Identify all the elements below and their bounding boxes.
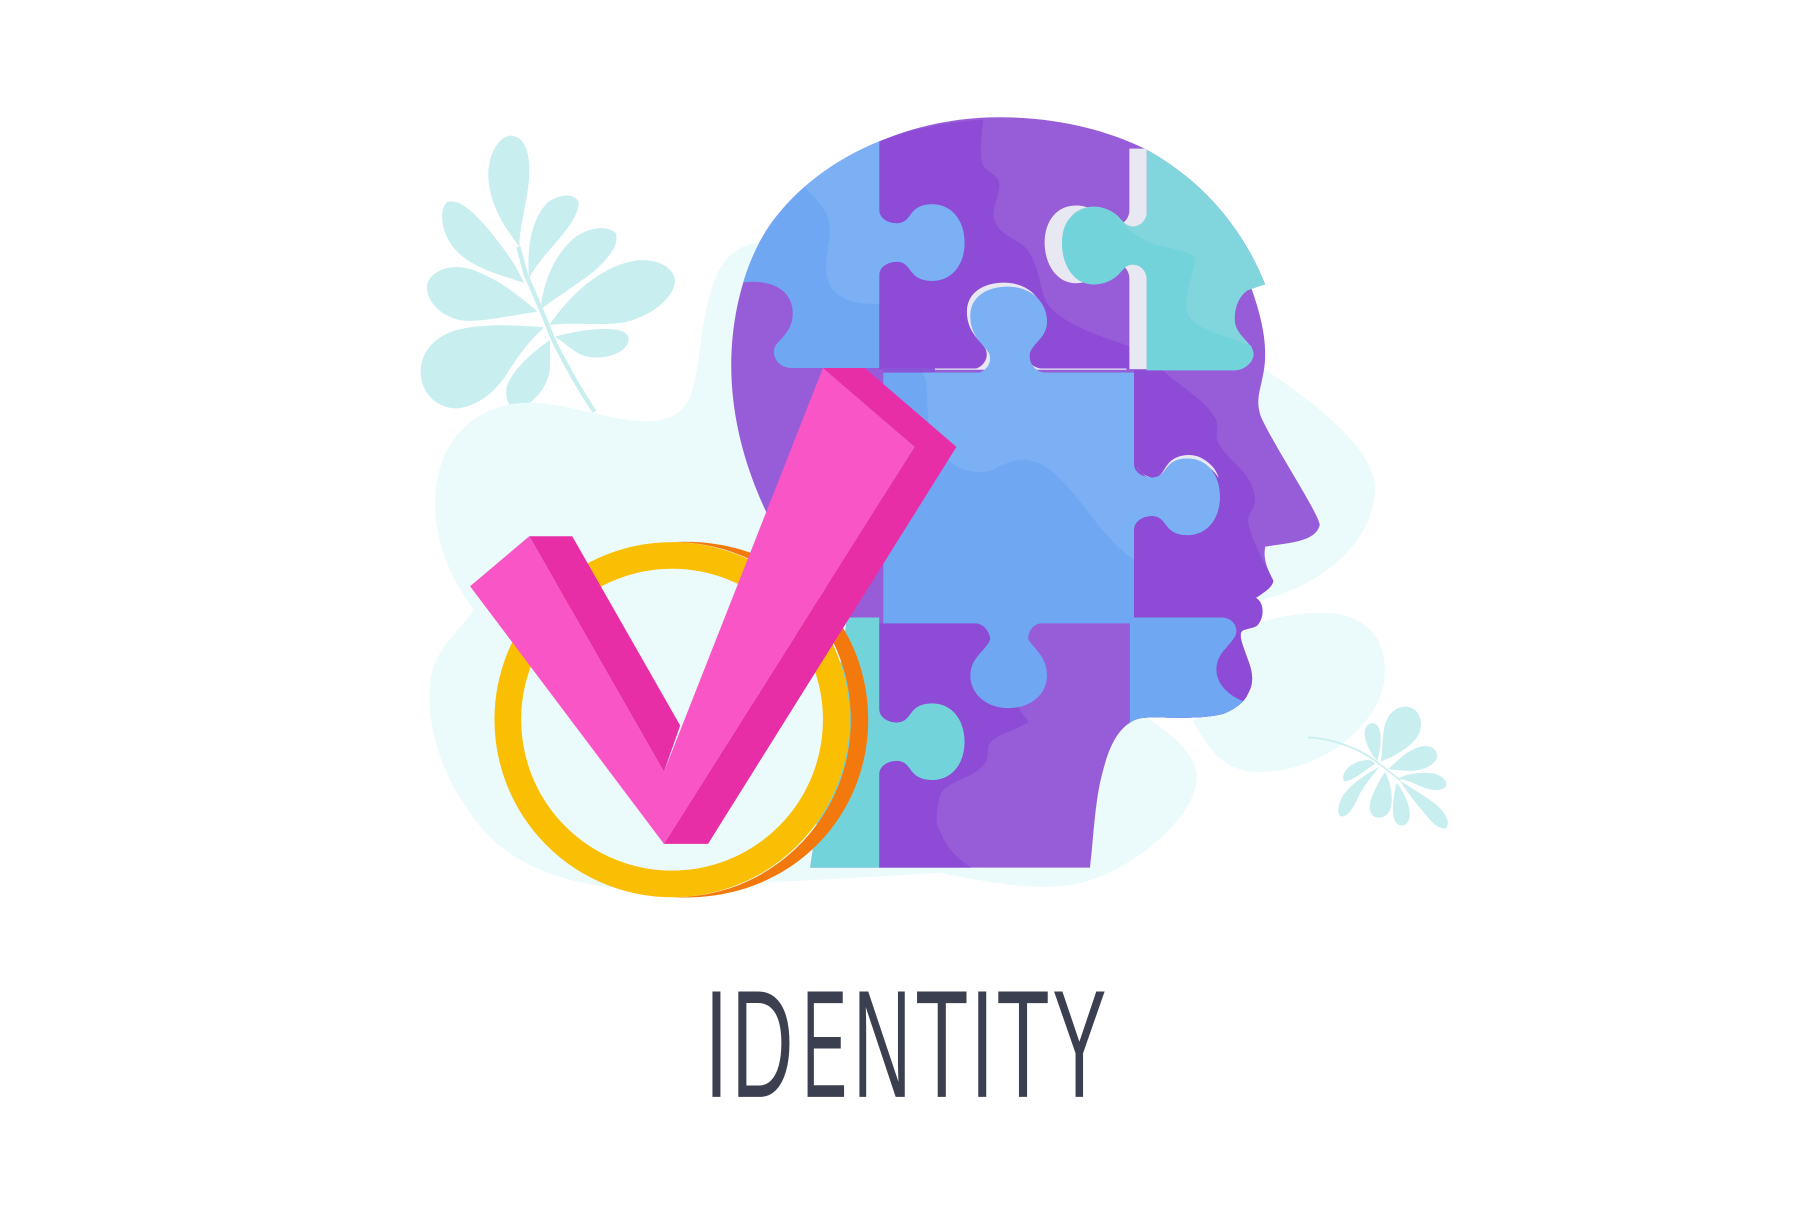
icon: small leaf branch xyxy=(1308,707,1448,828)
leaf 2 xyxy=(528,196,578,278)
background blob: main xyxy=(429,241,1375,889)
small leaf b xyxy=(1381,707,1421,762)
leaf 3 xyxy=(442,201,524,283)
icon: gold ring xyxy=(508,542,868,898)
leaf 6 xyxy=(549,260,675,325)
title: T xyxy=(915,959,968,1130)
check mark dark side xyxy=(529,368,956,844)
icon: large leaf branch xyxy=(421,136,675,412)
infographic canvas xyxy=(420,117,1448,1097)
puzzle piece: upper dark purple shade xyxy=(879,120,1132,369)
puzzle piece: center blue xyxy=(883,287,1220,708)
icon: pink check mark xyxy=(470,368,956,844)
puzzle piece: right dark purple shade xyxy=(1134,370,1274,720)
puzzle piece: lower right blue xyxy=(1130,618,1243,723)
small leaf f xyxy=(1393,783,1410,826)
puzzle piece highlight: top-left blue xyxy=(804,141,964,304)
leaf 1 xyxy=(488,136,529,247)
background blob: lower right xyxy=(1193,613,1385,772)
puzzle piece shade: teal top right xyxy=(1062,207,1254,370)
check mark light face xyxy=(470,368,915,844)
title: E xyxy=(802,959,847,1130)
puzzle piece shadow: teal offset xyxy=(1045,149,1147,369)
puzzle piece: top-left blue xyxy=(744,141,964,368)
leaf 4 xyxy=(541,228,617,309)
title: D xyxy=(731,959,794,1130)
leaf 7 xyxy=(421,325,544,408)
puzzle knob shadow: center right xyxy=(1136,455,1219,478)
leaf 8 xyxy=(555,329,629,357)
leaf stem xyxy=(518,247,594,412)
puzzle piece shadow: center knob xyxy=(934,282,1126,370)
small leaf g xyxy=(1370,772,1392,818)
small leaf i xyxy=(1343,760,1375,781)
small leaf c xyxy=(1388,746,1437,771)
small leaf h xyxy=(1338,767,1379,816)
small leaf d xyxy=(1398,773,1446,790)
small stem xyxy=(1308,737,1400,780)
title: I xyxy=(970,959,994,1130)
title: Y xyxy=(1052,959,1106,1130)
small leaf e xyxy=(1400,781,1448,828)
title: N xyxy=(853,959,911,1130)
puzzle piece highlight: center blue xyxy=(923,287,1220,559)
ring orange edge xyxy=(673,542,868,898)
head silhouette xyxy=(731,117,1320,868)
title: I xyxy=(705,959,728,1130)
purple strip above center piece xyxy=(883,368,935,373)
leaf 5 xyxy=(427,267,537,321)
puzzle piece: teal top right xyxy=(1062,150,1265,370)
small leaf a xyxy=(1365,723,1381,761)
title: T xyxy=(996,959,1050,1130)
leaf 9 xyxy=(506,340,550,407)
puzzle piece: lower dark purple shade xyxy=(879,623,1028,868)
puzzle piece: bottom-left teal xyxy=(810,618,965,868)
ring gold band xyxy=(508,555,836,884)
